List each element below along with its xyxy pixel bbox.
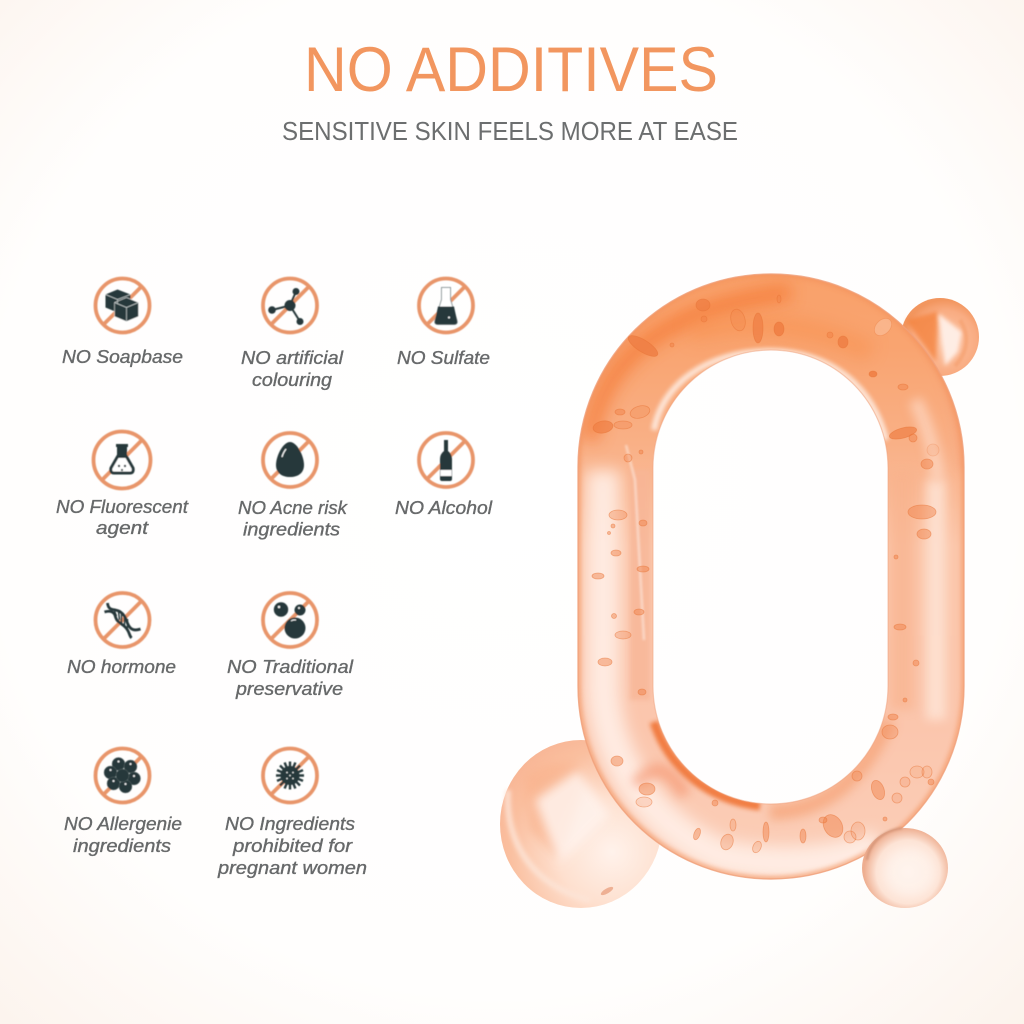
item: no soapbase (62, 278, 183, 367)
text block (56, 497, 189, 538)
text block (238, 498, 348, 540)
text block: agent (96, 518, 149, 538)
text block: NO Allergenie (64, 814, 182, 834)
deep orange shadow upper left (590, 292, 790, 440)
text block: prohibited for (232, 836, 353, 856)
ring edges (578, 274, 964, 879)
top right droplet (901, 298, 979, 376)
icon: bottle (419, 433, 473, 487)
text block: pregnant women (217, 858, 367, 878)
item: no alcohol: NO Alcohol (395, 498, 493, 518)
inside edge shading (578, 274, 964, 879)
large lower left droplet (500, 740, 662, 908)
text block (217, 814, 367, 878)
illustration: translucent serum ring with bubbles (500, 265, 979, 908)
pale band right (926, 480, 946, 720)
text block: NO Traditional (227, 657, 354, 677)
item: no fluorescent agent (56, 432, 189, 538)
darker inner left band (630, 510, 650, 700)
item: no allergenic ingredients (64, 748, 182, 856)
icon: virus (263, 748, 317, 802)
icon: sugar cubes (96, 278, 150, 332)
text block: NO Ingredients (225, 814, 355, 834)
text block (241, 348, 344, 390)
icon: three spheres (263, 593, 317, 647)
item: no sulfate: NO Sulfate (397, 348, 490, 368)
item: no hormone (67, 593, 176, 677)
icon: molecule (263, 278, 317, 332)
title: NO ADDITIVES (304, 35, 718, 105)
item: no soapbase: NO Soapbase (62, 347, 183, 367)
text block (64, 814, 182, 856)
icon: round flask (94, 432, 150, 488)
text block: NO Acne risk (238, 498, 348, 518)
peach inner right band (890, 470, 914, 710)
item: no artificial colouring (241, 278, 344, 390)
icon: conical flask (419, 278, 473, 332)
vivid lower left inner rim (654, 722, 760, 806)
item: no alcohol (395, 433, 493, 518)
pale inner rim (654, 351, 886, 440)
text block: NO artificial (241, 348, 344, 368)
text block: colouring (252, 370, 332, 390)
tube ring (570, 265, 970, 885)
icon: cell cluster (96, 748, 150, 802)
text block: ingredients (73, 836, 171, 856)
pale band left and bottom (603, 470, 880, 863)
icon: DNA helix (96, 593, 150, 647)
bubbles inside tube (592, 295, 939, 854)
orange band under crown (690, 324, 870, 352)
subtitle: SENSITIVE SKIN FEELS MORE AT EASE (282, 116, 738, 146)
small lower right droplet (862, 828, 948, 908)
panel: additive-free icon list (56, 278, 493, 878)
text block (227, 657, 354, 699)
item: no sulfate (397, 278, 490, 368)
item: no hormone: NO hormone (67, 657, 176, 677)
text block: NO Fluorescent (56, 497, 189, 517)
text block: ingredients (243, 520, 340, 540)
text block: preservative (235, 679, 343, 699)
item: no acne risk ingredients (238, 433, 348, 540)
item: no ingredients prohibited for pregnant women (217, 748, 367, 878)
icon: oil drop (263, 433, 317, 487)
item: no traditional preservative (227, 593, 354, 699)
